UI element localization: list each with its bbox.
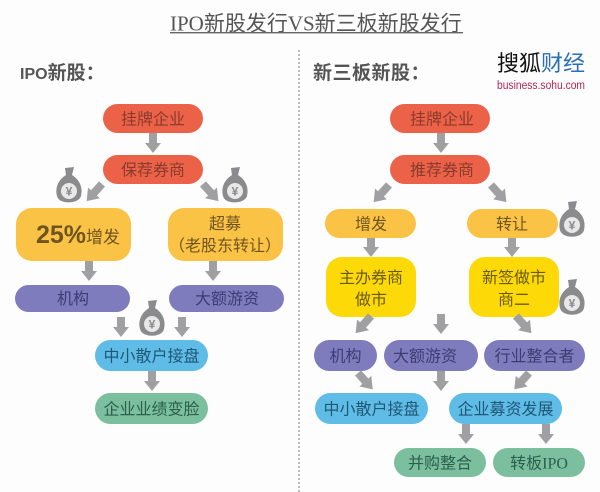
icon: money bag upper: [559, 201, 585, 237]
arrow: issue to institutions: [81, 261, 97, 281]
node: lead broker market making: 做市: [355, 291, 387, 309]
heading: NEEQ new shares: 新三板新股：: [313, 62, 430, 84]
title: IPO新股发行VS新三板新股发行: [170, 12, 462, 36]
node: M&A consolidation: 并购整合: [408, 454, 472, 472]
node: sponsor broker: [103, 155, 203, 184]
node: company fundraising: [449, 393, 562, 424]
panel: NEEQ flow: [314, 104, 585, 477]
logo: Sohu Business: business.sohu.com: [497, 80, 585, 92]
arrow: fundraising to board transfer: [538, 424, 554, 444]
arrow: lead broker to institutions: [350, 311, 377, 338]
arrow: retail to performance change: [144, 371, 160, 391]
node: institutions: [15, 285, 130, 312]
node: new market maker: [469, 257, 559, 317]
node: large hot money: 大额游资: [195, 290, 259, 308]
node: over-allotment: 超募: [209, 215, 241, 233]
node: large hot money: [384, 340, 478, 371]
heading: IPO new shares: IPO新股：: [20, 62, 105, 84]
node: new market maker: 商二: [498, 291, 530, 309]
node: industry consolidators: [484, 340, 585, 371]
node: 25% new issue: [16, 208, 131, 261]
arrow: consolidators to fundraising: [508, 368, 535, 395]
arrow: sponsor to over-allotment: [197, 179, 224, 206]
node: transfer: [467, 209, 558, 238]
arrow: fundraising to M&A: [458, 424, 474, 444]
node: retail investors: [315, 393, 428, 424]
node: listed company: [103, 104, 203, 133]
icon: money bag right: ¥: [232, 184, 239, 198]
arrow: broker to issue: [368, 180, 395, 207]
icon: money bag left: ¥: [66, 184, 73, 198]
arrow: institutions to retail: [352, 368, 379, 395]
node: large hot money: 大额游资: [393, 348, 457, 366]
node: new issue: 增发: [355, 216, 387, 234]
arrow: transfer to new market maker: [504, 238, 520, 257]
node: over-allotment: [168, 208, 283, 261]
logo: Sohu Business: 搜狐财经: [497, 51, 585, 76]
icon: money bag lower: ¥: [569, 296, 576, 310]
node: industry consolidators: 行业整合者: [494, 348, 575, 366]
icon: money bag lower: [559, 279, 585, 315]
node: institutions: [314, 340, 377, 371]
icon: money bag right: [222, 167, 248, 202]
node: lead broker market making: 主办券商: [339, 269, 403, 287]
icon: money bag centre: [139, 300, 165, 336]
node: transfer: 转让: [496, 216, 528, 234]
node: transfer to IPO: 转板IPO: [510, 454, 568, 472]
node: company fundraising: 企业募资发展: [457, 400, 554, 418]
node: over-allotment: （老股东转让）: [169, 237, 281, 255]
node: performance change: [95, 393, 208, 424]
node: institutions: 机构: [329, 348, 362, 366]
node: new issue: [325, 209, 416, 238]
panel: IPO flow: [15, 104, 284, 424]
arrow: large funds to retail: [174, 317, 190, 337]
arrow: sponsor to 25% issue: [81, 179, 108, 206]
logo: Sohu Business: [497, 51, 585, 92]
node: recommending broker: 推荐券商: [410, 162, 474, 180]
node: performance change: 企业业绩变脸: [103, 400, 200, 418]
node: new market maker: 新签做市: [482, 269, 546, 287]
node: retail investors: 中小散户接盘: [323, 400, 420, 418]
node: recommending broker: [390, 155, 490, 184]
arrow: large funds down: [433, 371, 449, 391]
node: listed company: 挂牌企业: [410, 110, 474, 128]
arrow: over-allotment to large funds: [205, 261, 221, 281]
node: listed company: [390, 104, 490, 133]
icon: money bag centre: ¥: [149, 318, 156, 332]
arrow: new market maker to consolidators: [510, 311, 537, 338]
arrow: company to sponsor: [145, 133, 161, 153]
node: listed company: 挂牌企业: [121, 110, 185, 128]
node: 25% new issue: 25%增发: [36, 221, 120, 249]
arrow: company to recommending broker: [433, 133, 449, 153]
node: sponsor broker: 保荐券商: [121, 162, 185, 180]
node: M&A consolidation: [394, 448, 486, 477]
arrow: to large funds: [433, 314, 449, 334]
node: retail investors: [95, 340, 208, 371]
node: transfer to IPO: [493, 448, 585, 477]
icon: money bag left: [56, 167, 82, 202]
arrow: broker to transfer: [485, 180, 512, 207]
arrow: issue to lead broker: [363, 238, 379, 257]
node: retail investors: 中小散户接盘: [103, 346, 200, 366]
arrow: institutions to retail: [113, 317, 129, 337]
node: large hot money: [169, 285, 284, 312]
node: lead broker market making: [326, 257, 416, 317]
icon: money bag upper: ¥: [569, 218, 576, 232]
node: institutions: 机构: [57, 290, 89, 308]
